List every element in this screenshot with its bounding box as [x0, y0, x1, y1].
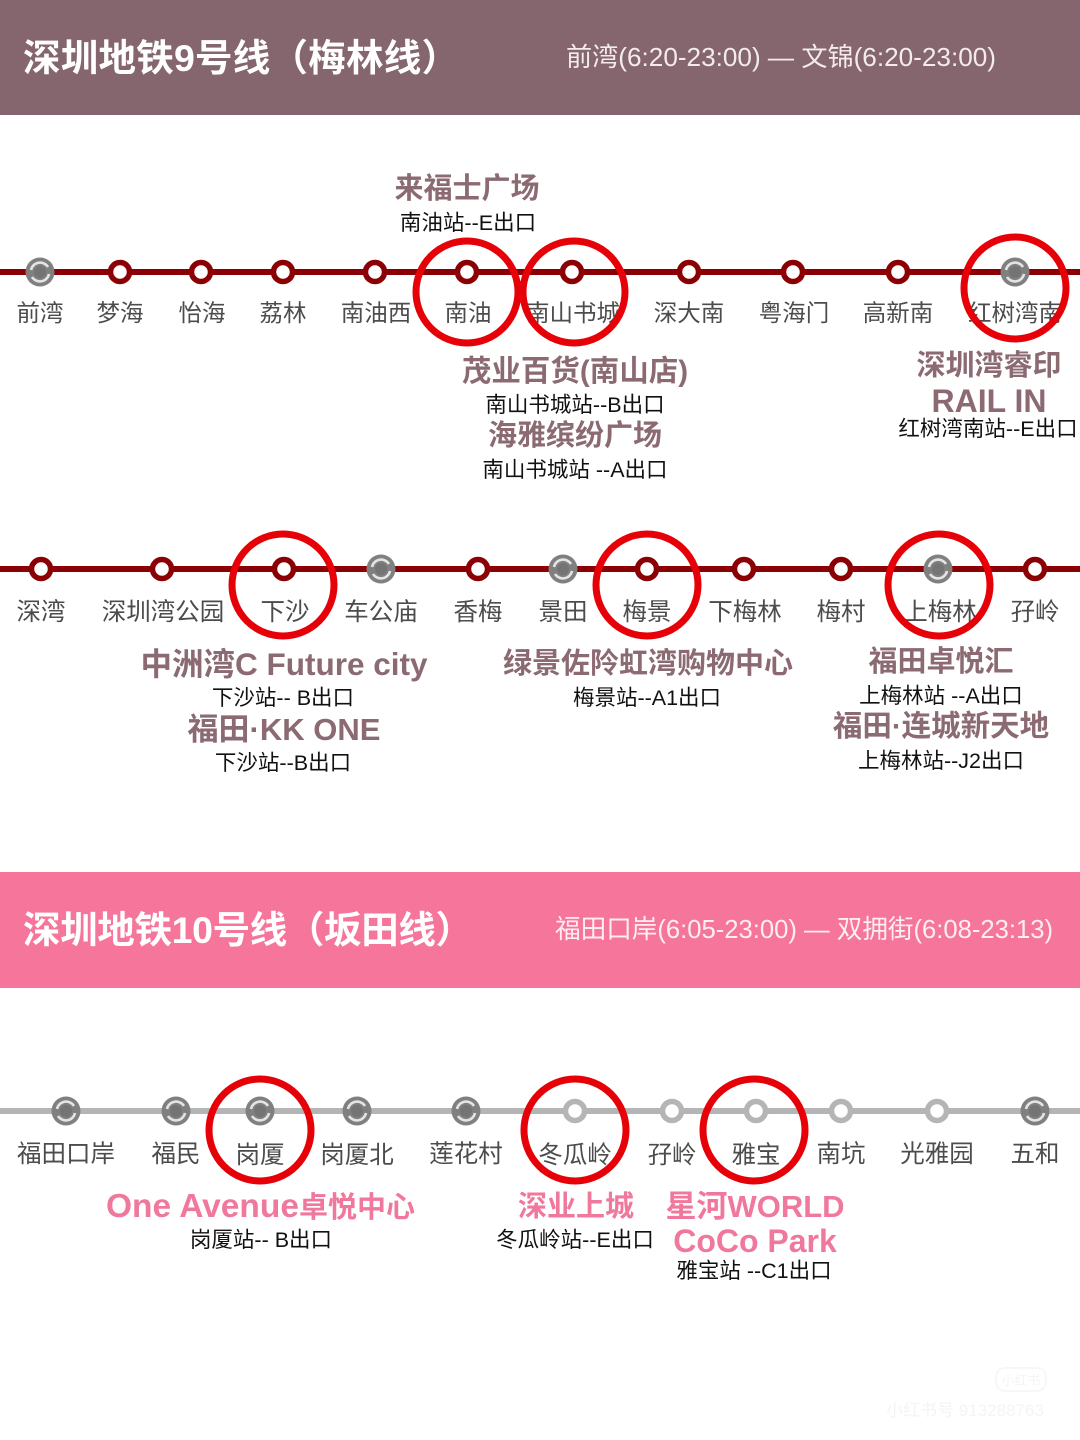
route diagram: line 9 lower [0, 554, 1080, 626]
callout: 星河WORLD CoCo Park: 雅宝站 --C1出口 [676, 1259, 832, 1283]
callout: 绿景佐阾虹湾购物中心: 梅景站--A1出口 [573, 686, 721, 710]
callout: 星河WORLD CoCo Park: 星河WORLD [665, 1189, 845, 1224]
callout: 中洲湾 and KK ONE: 中洲湾C Future city [140, 646, 428, 682]
route diagram: line 10: 岗厦 [236, 1142, 284, 1169]
callout: 来福士广场: 南油站--E出口 [400, 211, 536, 235]
highlight ring: 下沙 [232, 534, 334, 636]
route diagram: line 10: 光雅园 [900, 1140, 974, 1168]
route diagram: line 9 upper: 红树湾南 [968, 300, 1062, 326]
highlight ring: 上梅林 [888, 534, 990, 636]
callout: 茂业百货 and 海雅缤纷广场: 海雅缤纷广场 [488, 419, 662, 452]
route diagram: line 10 [0, 1096, 1080, 1169]
callout: 茂业百货 and 海雅缤纷广场 [462, 355, 688, 482]
route diagram: line 10: 岗厦北 [320, 1142, 394, 1169]
highlight ring: 冬瓜岭 [524, 1079, 626, 1181]
watermark [886, 1368, 1046, 1420]
route diagram: line 9 lower: 香梅 [454, 598, 502, 626]
route diagram: line 9 upper: 怡海 [178, 300, 226, 326]
watermark: 小红书号 913288763 [886, 1401, 1044, 1420]
route diagram: line 9 upper: 荔林 [260, 300, 306, 326]
route diagram: line 9 upper: 前湾 [16, 300, 64, 326]
route diagram: line 9 lower: 上梅林 [903, 598, 977, 626]
route diagram: line 10: 福田口岸 [17, 1140, 115, 1168]
callout: 星河WORLD CoCo Park [665, 1189, 845, 1283]
route diagram: line 9 upper: 南油 [444, 300, 492, 326]
watermark: 小红书 [1001, 1373, 1041, 1388]
callout: One Avenue卓悦中心 [106, 1188, 415, 1252]
route diagram: line 9 lower: 下沙 [260, 599, 310, 626]
highlight ring: 梅景 [596, 534, 698, 636]
route diagram: line 9 upper: 粤海门 [759, 300, 829, 326]
route diagram: line 9 lower: 梅村 [816, 598, 866, 626]
route diagram: line 10: 莲花村 [429, 1140, 503, 1168]
route diagram: line 9 upper [0, 258, 1080, 326]
callout: 中洲湾 and KK ONE: 下沙站-- B出口 [212, 686, 354, 710]
route diagram: line 9 upper: 深大南 [654, 300, 724, 326]
callout: 绿景佐阾虹湾购物中心: 绿景佐阾虹湾购物中心 [503, 646, 793, 680]
operating hours: line 10: 福田口岸(6:05-23:00) — 双拥街(6:08-23:13) [555, 914, 1053, 944]
callout: 茂业百货 and 海雅缤纷广场: 茂业百货(南山店) [462, 355, 688, 388]
callout: 福田卓悦汇 and 连城新天地: 福田·连城新天地 [833, 710, 1049, 743]
header: line 9 [0, 0, 1080, 115]
route diagram: line 10: 南坑 [816, 1140, 866, 1168]
callout: 深业上城 [496, 1190, 654, 1252]
highlight ring: 岗厦 [209, 1079, 311, 1181]
highlight ring: 南山书城 [523, 241, 625, 343]
highlight ring: 红树湾南 [964, 237, 1066, 339]
route diagram: line 10: 雅宝 [732, 1141, 780, 1169]
route diagram: line 9 lower: 梅景 [622, 598, 672, 626]
callout: One Avenue卓悦中心: 岗厦站-- B出口 [190, 1228, 332, 1252]
callout: 中洲湾 and KK ONE: 下沙站--B出口 [215, 751, 351, 775]
callout: One Avenue卓悦中心: One Avenue卓悦中心 [106, 1188, 415, 1225]
callout: 中洲湾 and KK ONE: 福田·KK ONE [188, 712, 380, 747]
callout: 福田卓悦汇 and 连城新天地: 上梅林站 --A出口 [859, 684, 1023, 708]
route diagram: line 9 lower: 车公庙 [344, 598, 418, 626]
operating hours: line 9: 前湾(6:20-23:00) — 文锦(6:20-23:00) [566, 42, 996, 72]
callout: 深圳湾睿印 RAIL IN: 红树湾南站--E出口 [898, 417, 1078, 441]
highlight ring: 雅宝 [703, 1079, 805, 1181]
callout: 星河WORLD CoCo Park: CoCo Park [673, 1223, 837, 1259]
callout: 绿景佐阾虹湾购物中心 [503, 646, 793, 710]
callout: 深圳湾睿印 RAIL IN: RAIL IN [932, 383, 1046, 419]
header: line 10 [0, 872, 1080, 988]
callout: 中洲湾 and KK ONE [140, 646, 428, 775]
title: line 10: 深圳地铁10号线（坂田线） [23, 909, 473, 951]
route diagram: line 9 upper: 高新南 [863, 300, 933, 326]
callout: 茂业百货 and 海雅缤纷广场: 南山书城站--B出口 [485, 393, 665, 417]
route diagram: line 9 lower: 景田 [538, 599, 588, 626]
callout: 来福士广场: 来福士广场 [394, 172, 540, 205]
route diagram: line 9 lower: 孖岭 [1010, 598, 1060, 626]
callout: 福田卓悦汇 and 连城新天地: 福田卓悦汇 [868, 645, 1014, 678]
route diagram: line 10: 冬瓜岭 [538, 1141, 612, 1169]
route diagram: line 9 lower: 深圳湾公园 [102, 598, 224, 626]
route diagram: line 9 upper: 南山书城 [526, 300, 620, 326]
route diagram: line 9 lower: 下梅林 [708, 598, 782, 626]
callout: 深业上城: 深业上城 [518, 1190, 634, 1223]
callout: 福田卓悦汇 and 连城新天地: 上梅林站--J2出口 [858, 749, 1024, 773]
callout: 深圳湾睿印 RAIL IN [898, 348, 1078, 441]
route diagram: line 9 upper: 南油西 [341, 300, 411, 326]
route diagram: line 9 lower: 深湾 [16, 598, 66, 626]
route diagram: line 10: 福民 [152, 1140, 200, 1168]
callout: 福田卓悦汇 and 连城新天地 [833, 645, 1049, 773]
callout: 茂业百货 and 海雅缤纷广场: 南山书城站 --A出口 [482, 458, 668, 482]
route diagram: line 10: 五和 [1010, 1140, 1060, 1168]
route diagram: line 10: 孖岭 [648, 1141, 696, 1169]
callout: 来福士广场 [394, 172, 540, 235]
callout: 深业上城: 冬瓜岭站--E出口 [496, 1228, 654, 1252]
title: line 9: 深圳地铁9号线（梅林线） [23, 37, 459, 79]
callout: 深圳湾睿印 RAIL IN: 深圳湾睿印 [916, 348, 1062, 382]
highlight ring: 南油 [416, 241, 518, 343]
route diagram: line 9 upper: 梦海 [96, 300, 144, 326]
